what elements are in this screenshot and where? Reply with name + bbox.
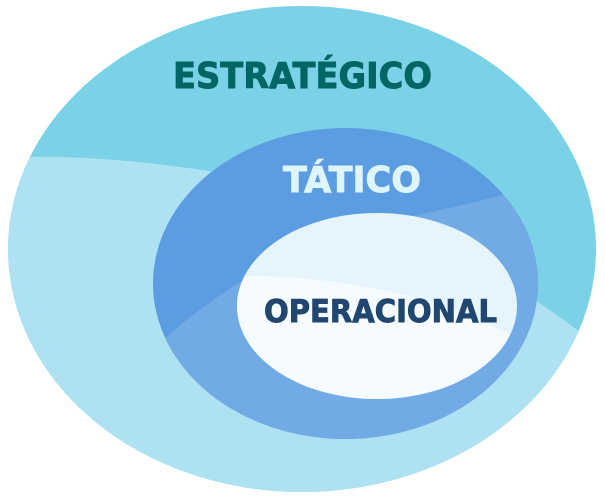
heading: TÁTICO: TÁTICO bbox=[283, 159, 421, 201]
middle ellipse: tático bbox=[150, 128, 545, 445]
heading: ESTRATÉGICO: ESTRATÉGICO bbox=[173, 55, 432, 97]
inner ellipse: operacional bbox=[230, 213, 520, 405]
heading: OPERACIONAL: OPERACIONAL bbox=[264, 294, 497, 330]
